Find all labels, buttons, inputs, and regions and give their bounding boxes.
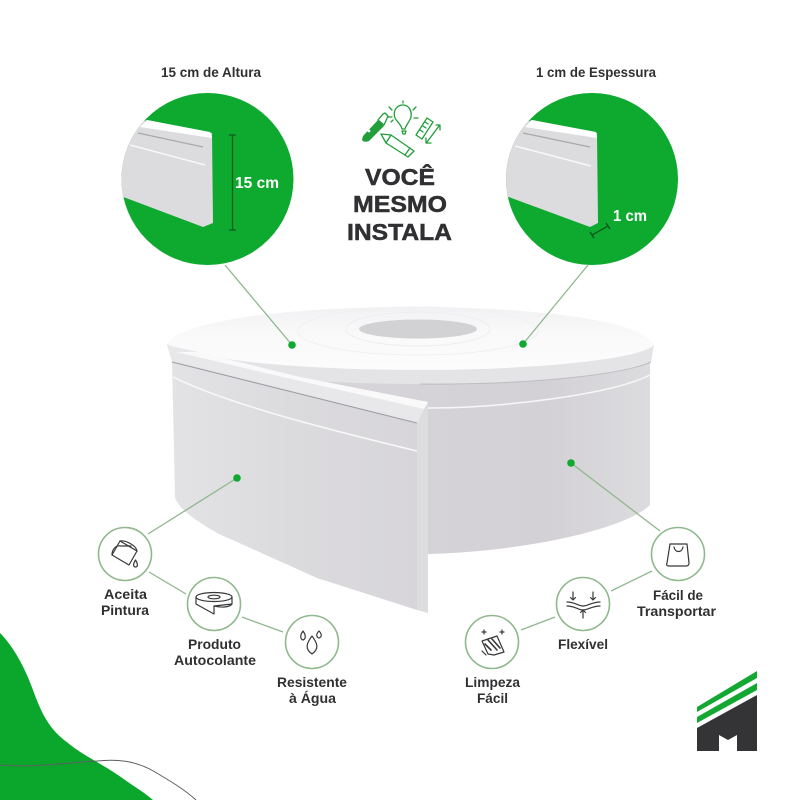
feature: Flexível: Flexível — [558, 636, 608, 652]
roll right body — [240, 360, 650, 554]
feature: Produto Autocolante: Autocolante — [174, 652, 256, 668]
roll centre hole — [359, 320, 477, 338]
feature: Produto Autocolante — [174, 578, 256, 668]
feature: Limpeza Fácil: Fácil — [477, 690, 508, 706]
icon: cleaning hand — [482, 630, 504, 655]
strip end face — [417, 403, 428, 613]
title: VOCÊ — [365, 163, 435, 190]
roll outer band under the top face — [167, 344, 654, 384]
connector dots — [233, 340, 575, 482]
dimension text 15 cm: 15 cm — [235, 175, 279, 192]
feature: Fácil de Transportar: Fácil de — [653, 587, 703, 603]
loose strip face — [172, 360, 417, 610]
feature: Resistente à Água: Resistente — [277, 674, 347, 690]
icon: water drops — [301, 631, 321, 654]
dimension bar 15 cm — [229, 135, 236, 230]
feature: Aceita Pintura — [98, 528, 152, 618]
strip top edge — [167, 345, 428, 423]
roll top face — [167, 307, 654, 370]
feature: Produto Autocolante: Produto — [188, 636, 241, 652]
icon: shopping bag — [667, 544, 689, 566]
icon: tools and light bulb — [362, 101, 440, 157]
icon: tape roll — [196, 592, 232, 614]
feature: Flexível — [556, 578, 610, 652]
product: baseboard roll — [167, 307, 654, 613]
logo — [697, 671, 757, 751]
feature: Resistente à Água: à Água — [289, 690, 336, 706]
icon: paint can — [112, 541, 137, 567]
icon: flexing material — [567, 592, 600, 618]
feature: Aceita Pintura: Aceita — [104, 586, 147, 602]
feature: Limpeza Fácil: Limpeza — [465, 674, 520, 690]
title — [347, 163, 452, 245]
background blob — [0, 633, 153, 800]
shadow line under band — [420, 362, 651, 384]
feature: Limpeza Fácil — [465, 616, 520, 706]
strip highlight — [173, 377, 417, 451]
panel: height detail circle — [110, 93, 294, 265]
feature: Fácil de Transportar: Transportar — [637, 603, 717, 619]
feature: Fácil de Transportar — [637, 528, 717, 619]
title: MESMO — [353, 191, 447, 217]
dimension bar 1 cm — [590, 223, 610, 238]
label: 15 cm de Altura: 15 cm de Altura — [161, 64, 261, 80]
feature: Aceita Pintura: Pintura — [101, 602, 149, 618]
decorative curve line — [0, 760, 196, 800]
feature: Resistente à Água — [277, 616, 347, 706]
strip groove — [172, 362, 417, 423]
roll top rings — [346, 312, 490, 346]
dimension text 1 cm: 1 cm — [613, 208, 647, 225]
highlight line on roll — [428, 375, 650, 408]
connector lines — [148, 265, 660, 632]
title: INSTALA — [347, 219, 452, 245]
label: 1 cm de Espessura: 1 cm de Espessura — [536, 64, 656, 80]
panel: thickness detail circle — [495, 93, 678, 265]
